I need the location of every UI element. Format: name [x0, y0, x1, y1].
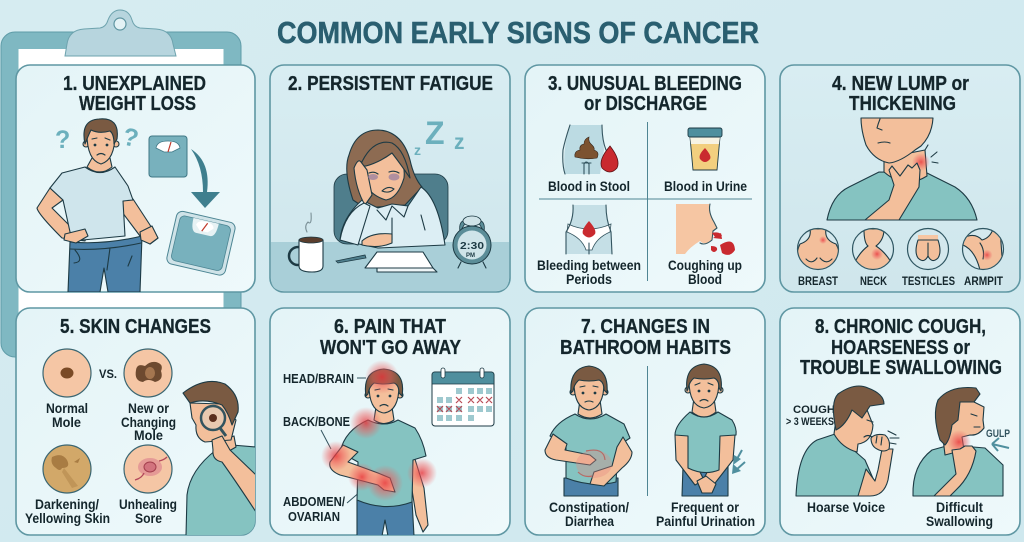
heading 6: [320, 316, 462, 359]
man swallowing: [913, 388, 1009, 496]
label bleeding between periods: Bleeding between: [537, 257, 641, 273]
label blood in stool: Blood in Stool: [548, 178, 630, 194]
heading 3: [548, 73, 742, 115]
labels body locations: [798, 274, 1004, 288]
pain labels: HEAD/BRAIN: [283, 371, 354, 386]
label urination: Frequent or: [671, 499, 739, 515]
heading 6: WON'T GO AWAY: [320, 337, 462, 359]
label constipation: [549, 499, 629, 529]
zzz sleep letters: Z: [425, 115, 445, 151]
heading 4: [832, 73, 969, 115]
heading 3: 3. UNUSUAL BLEEDING: [548, 73, 742, 95]
man with stomach trouble: [545, 366, 632, 496]
label darkening skin: [25, 496, 110, 526]
small scale: [149, 136, 187, 177]
heading 1: [63, 73, 206, 115]
zzz sleep letters: z: [414, 142, 421, 158]
heading 4: 4. NEW LUMP or: [832, 73, 969, 95]
heading 7: [560, 316, 731, 359]
label normal mole: Normal: [46, 400, 88, 416]
label cough over three weeks: [786, 404, 835, 428]
zzz sleep letters: [414, 115, 464, 158]
label changing mole: New or: [128, 400, 169, 416]
man with urinary trouble: [675, 364, 736, 496]
alarm clock 2:30 PM: PM: [466, 253, 475, 259]
label changing mole: Changing: [121, 414, 176, 430]
man with magnifying glass: [183, 381, 256, 536]
question marks: ?: [55, 126, 70, 154]
heading 1: 1. UNEXPLAINED: [63, 73, 206, 95]
clipboard backdrop: [1, 10, 241, 357]
label coughing up blood: Blood: [688, 271, 722, 287]
pain arrows: [732, 450, 745, 474]
panel 3: unusual bleeding or discharge: [525, 65, 765, 292]
label leader lines: [321, 378, 366, 503]
question marks: ?: [120, 123, 141, 153]
label urination: [656, 499, 755, 529]
changing mole: [124, 349, 172, 397]
label bleeding between periods: Periods: [566, 271, 612, 287]
label changing mole: Mole: [134, 427, 163, 443]
label changing mole: [121, 400, 176, 443]
label darkening skin: Darkening/: [35, 496, 99, 512]
label coughing up blood: [668, 257, 742, 287]
heading 6: 6. PAIN THAT: [334, 316, 446, 338]
label normal mole: [46, 400, 88, 430]
calendar: [432, 368, 494, 426]
darkening skin: [43, 445, 91, 493]
labels body locations: BREAST: [798, 274, 839, 288]
normal mole: [43, 349, 91, 397]
pain labels: OVARIAN: [288, 509, 340, 524]
desk surface: [271, 242, 509, 291]
label hoarse voice: Hoarse Voice: [807, 499, 885, 515]
pen and papers: [336, 252, 437, 272]
pain labels: ABDOMEN/: [283, 494, 345, 509]
icon: blood in stool: [563, 125, 618, 174]
label difficult swallowing: [926, 499, 993, 529]
pain labels: [283, 371, 354, 524]
unhealing sore: [124, 445, 172, 493]
alarm clock 2:30 PM: 2:30: [460, 241, 485, 252]
label constipation: Constipation/: [549, 499, 629, 515]
icon: blood in urine: [688, 128, 722, 170]
man holding loose jeans: [37, 119, 158, 292]
icon: coughing up blood: [676, 204, 735, 255]
label cough over three weeks: > 3 WEEKS: [786, 416, 834, 428]
label coughing up blood: Coughing up: [668, 257, 742, 273]
label gulp: GULP: [986, 428, 1010, 440]
man coughing: [796, 386, 899, 496]
label darkening skin: Yellowing Skin: [25, 510, 110, 526]
heading 3: or DISCHARGE: [584, 93, 707, 115]
tired woman at desk: [334, 130, 448, 248]
panel 6: pain that won't go away: [270, 308, 510, 536]
label cough over three weeks: COUGH: [793, 404, 835, 416]
heading 4: THICKENING: [849, 93, 956, 115]
labels body locations: TESTICLES: [902, 274, 955, 288]
man with pain areas: [321, 360, 437, 536]
panel 5: skin changes: [16, 308, 256, 536]
pain labels: BACK/BONE: [283, 414, 350, 429]
body location circles: [796, 228, 1004, 272]
label unhealing sore: [119, 496, 177, 526]
labels body locations: NECK: [860, 274, 887, 288]
label bleeding between periods: [537, 257, 641, 287]
panel 2: persistent fatigue: [270, 65, 510, 292]
panel 8: chronic cough, hoarseness or trouble swallowing: [780, 308, 1020, 535]
heading 7: 7. CHANGES IN: [581, 316, 710, 338]
heading 8: HOARSENESS or: [831, 337, 970, 359]
label vs: VS.: [99, 367, 117, 381]
heading 7: BATHROOM HABITS: [560, 337, 731, 359]
panel 1: unexplained weight loss: [16, 65, 255, 292]
heading 8: 8. CHRONIC COUGH,: [815, 316, 986, 338]
label normal mole: Mole: [52, 414, 81, 430]
label urination: Painful Urination: [656, 513, 755, 529]
icon: bleeding between periods: [566, 205, 612, 254]
alarm clock 2:30 PM: [453, 216, 491, 268]
person touching neck lump: [827, 118, 977, 220]
panel 7: changes in bathroom habits: [525, 308, 765, 535]
zzz sleep letters: z: [454, 131, 464, 154]
panel 4: new lump or thickening: [780, 65, 1020, 292]
label blood in urine: Blood in Urine: [664, 178, 747, 194]
label unhealing sore: Unhealing: [119, 496, 177, 512]
label constipation: Diarrhea: [565, 513, 614, 529]
label unhealing sore: Sore: [135, 510, 162, 526]
main title: COMMON EARLY SIGNS OF CANCER: [277, 15, 759, 50]
label difficult swallowing: Difficult: [936, 499, 983, 515]
heading 5: 5. SKIN CHANGES: [60, 316, 211, 338]
heading 1: WEIGHT LOSS: [79, 93, 196, 115]
label difficult swallowing: Swallowing: [926, 513, 993, 529]
coffee mug: [289, 213, 323, 272]
downward arrow: [191, 149, 220, 208]
tilted scale: [166, 210, 236, 276]
labels body locations: ARMPIT: [964, 274, 1004, 288]
question marks: [55, 123, 141, 154]
heading 2: 2. PERSISTENT FATIGUE: [288, 73, 493, 95]
heading 8: [800, 316, 1002, 379]
